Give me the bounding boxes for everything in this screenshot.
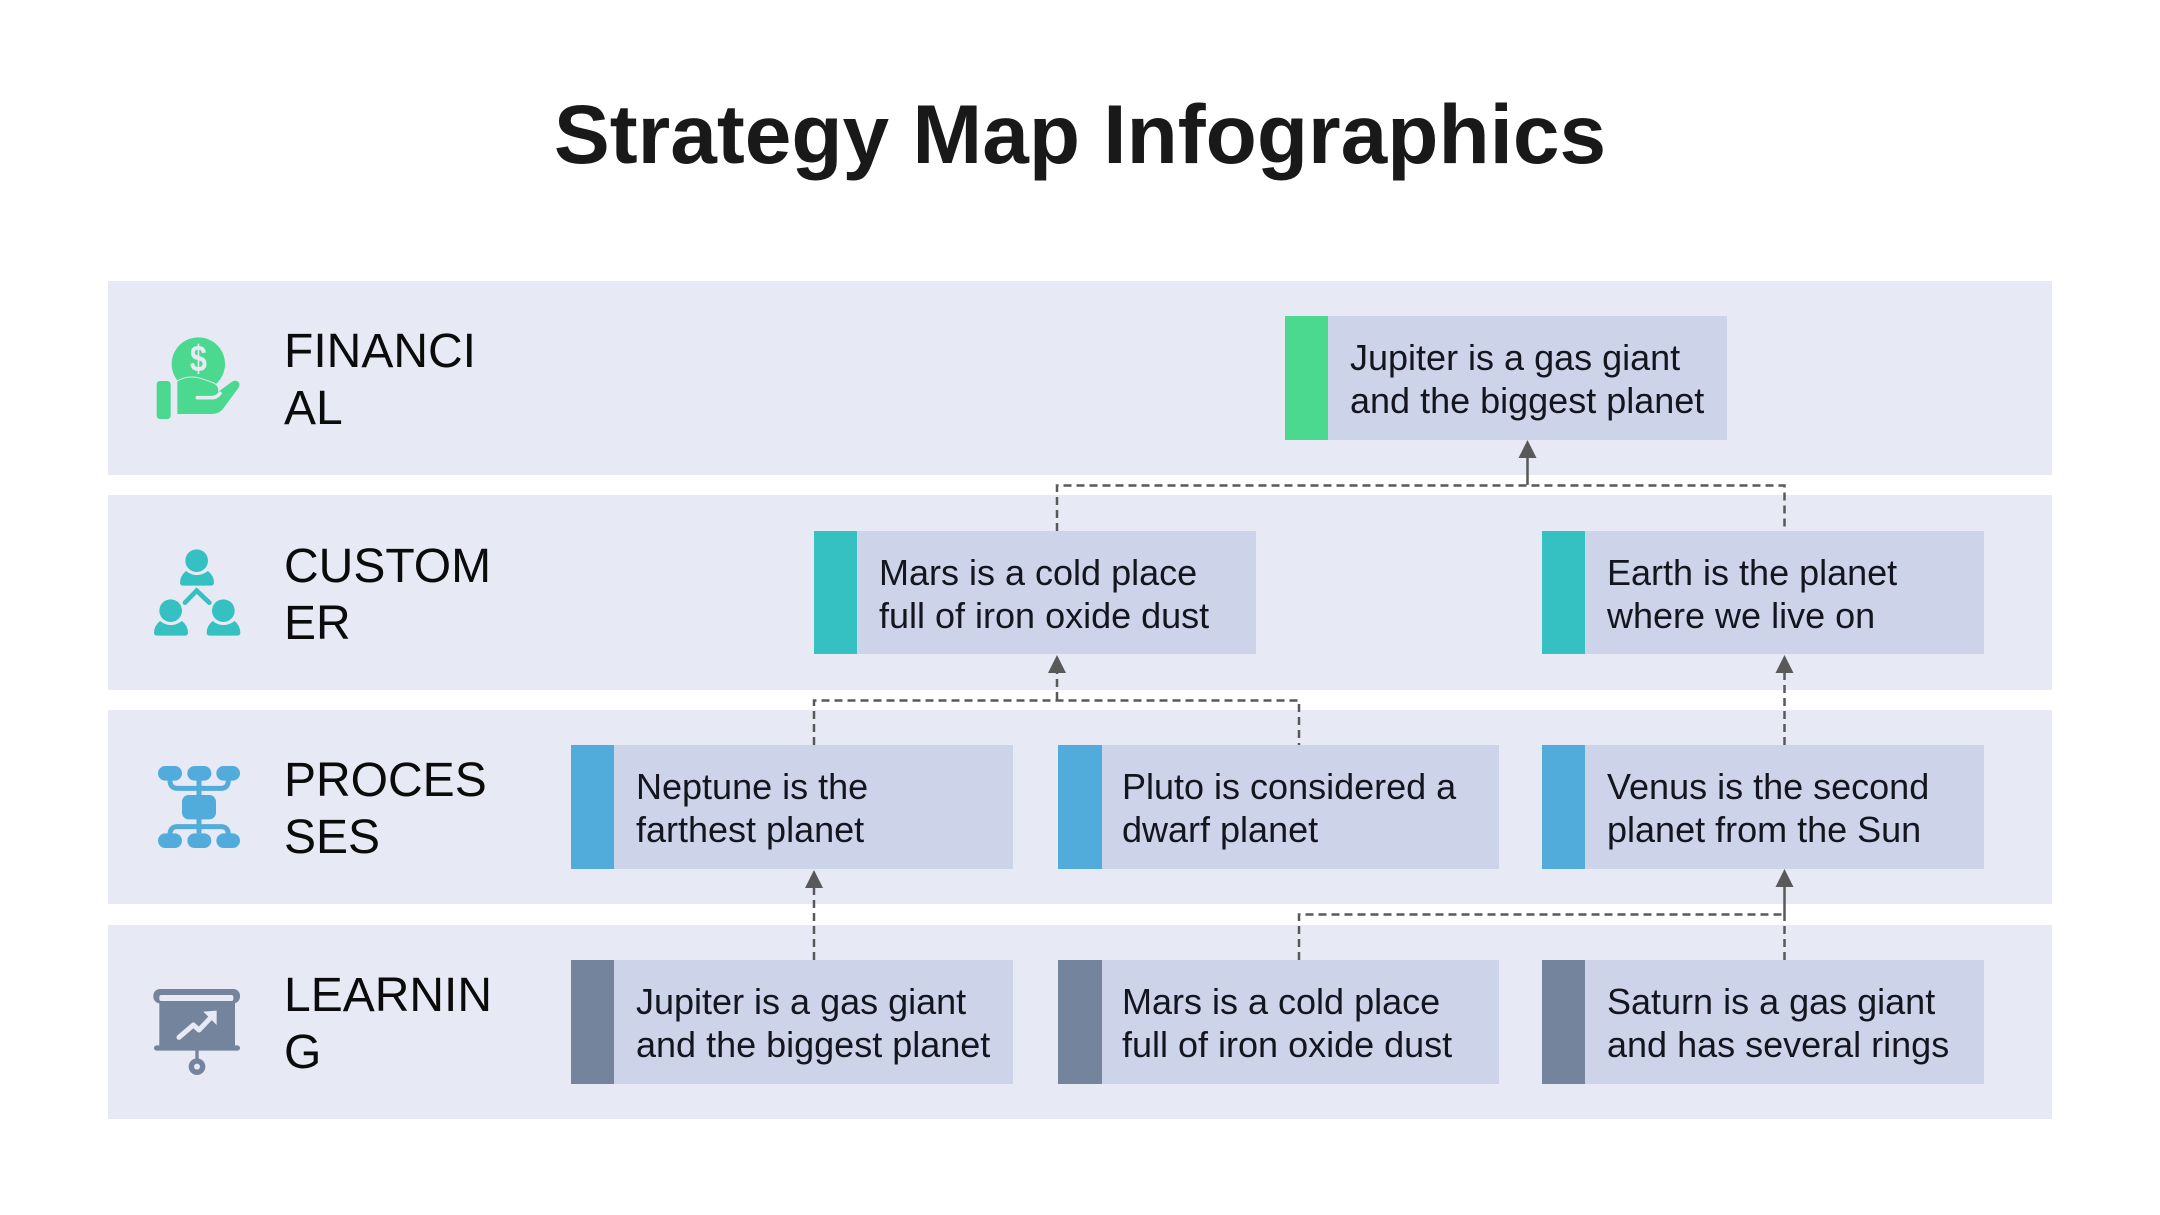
box: process Neptune: Neptune is the [636, 766, 868, 807]
panel: processes band [108, 710, 2052, 904]
box: learning Jupiter [571, 960, 1013, 1084]
box: learning Jupiter: and the biggest planet [636, 1024, 990, 1065]
title: Strategy Map Infographics [554, 87, 1606, 181]
label: financial: FINANCI [284, 325, 476, 378]
box: learning Mars [1058, 960, 1499, 1084]
box: learning Saturn: and has several rings [1607, 1024, 1949, 1065]
label: customer: CUSTOM [284, 540, 491, 593]
label: processes [284, 754, 487, 864]
label: financial [284, 325, 476, 435]
box: learning Saturn: Saturn is a gas giant [1607, 981, 1935, 1022]
label: learning: LEARNIN [284, 969, 492, 1022]
box: customer Earth: where we live on [1607, 595, 1875, 636]
box: learning Mars: full of iron oxide dust [1122, 1024, 1452, 1065]
box: customer Mars [814, 531, 1256, 654]
box: customer Earth [1542, 531, 1984, 654]
panel: financial band [108, 281, 2052, 475]
box: customer Mars: full of iron oxide dust [879, 595, 1209, 636]
box: process Venus [1542, 745, 1984, 869]
box: learning Jupiter: Jupiter is a gas giant [636, 981, 966, 1022]
box: process Neptune [571, 745, 1013, 869]
label: learning: G [284, 1026, 321, 1079]
box: process Venus: planet from the Sun [1607, 809, 1921, 850]
icon: hand holding coin: $ [190, 338, 207, 380]
label: customer: ER [284, 597, 351, 650]
label: processes: SES [284, 811, 380, 864]
box: financial Jupiter [1285, 316, 1727, 440]
box: process Neptune: farthest planet [636, 809, 864, 850]
label: learning [284, 969, 492, 1079]
box: learning Saturn [1542, 960, 1984, 1084]
box: financial Jupiter: Jupiter is a gas giant [1350, 337, 1680, 378]
label: processes: PROCES [284, 754, 487, 807]
box: process Pluto: Pluto is considered a [1122, 766, 1456, 807]
panel: learning band [108, 925, 2052, 1119]
box: process Pluto: dwarf planet [1122, 809, 1318, 850]
box: customer Earth: Earth is the planet [1607, 552, 1897, 593]
label: financial: AL [284, 382, 343, 435]
panel: customer band [108, 495, 2052, 690]
box: process Pluto [1058, 745, 1499, 869]
box: process Venus: Venus is the second [1607, 766, 1929, 807]
box: learning Mars: Mars is a cold place [1122, 981, 1440, 1022]
box: customer Mars: Mars is a cold place [879, 552, 1197, 593]
label: customer [284, 540, 491, 650]
box: financial Jupiter: and the biggest planet [1350, 380, 1704, 421]
